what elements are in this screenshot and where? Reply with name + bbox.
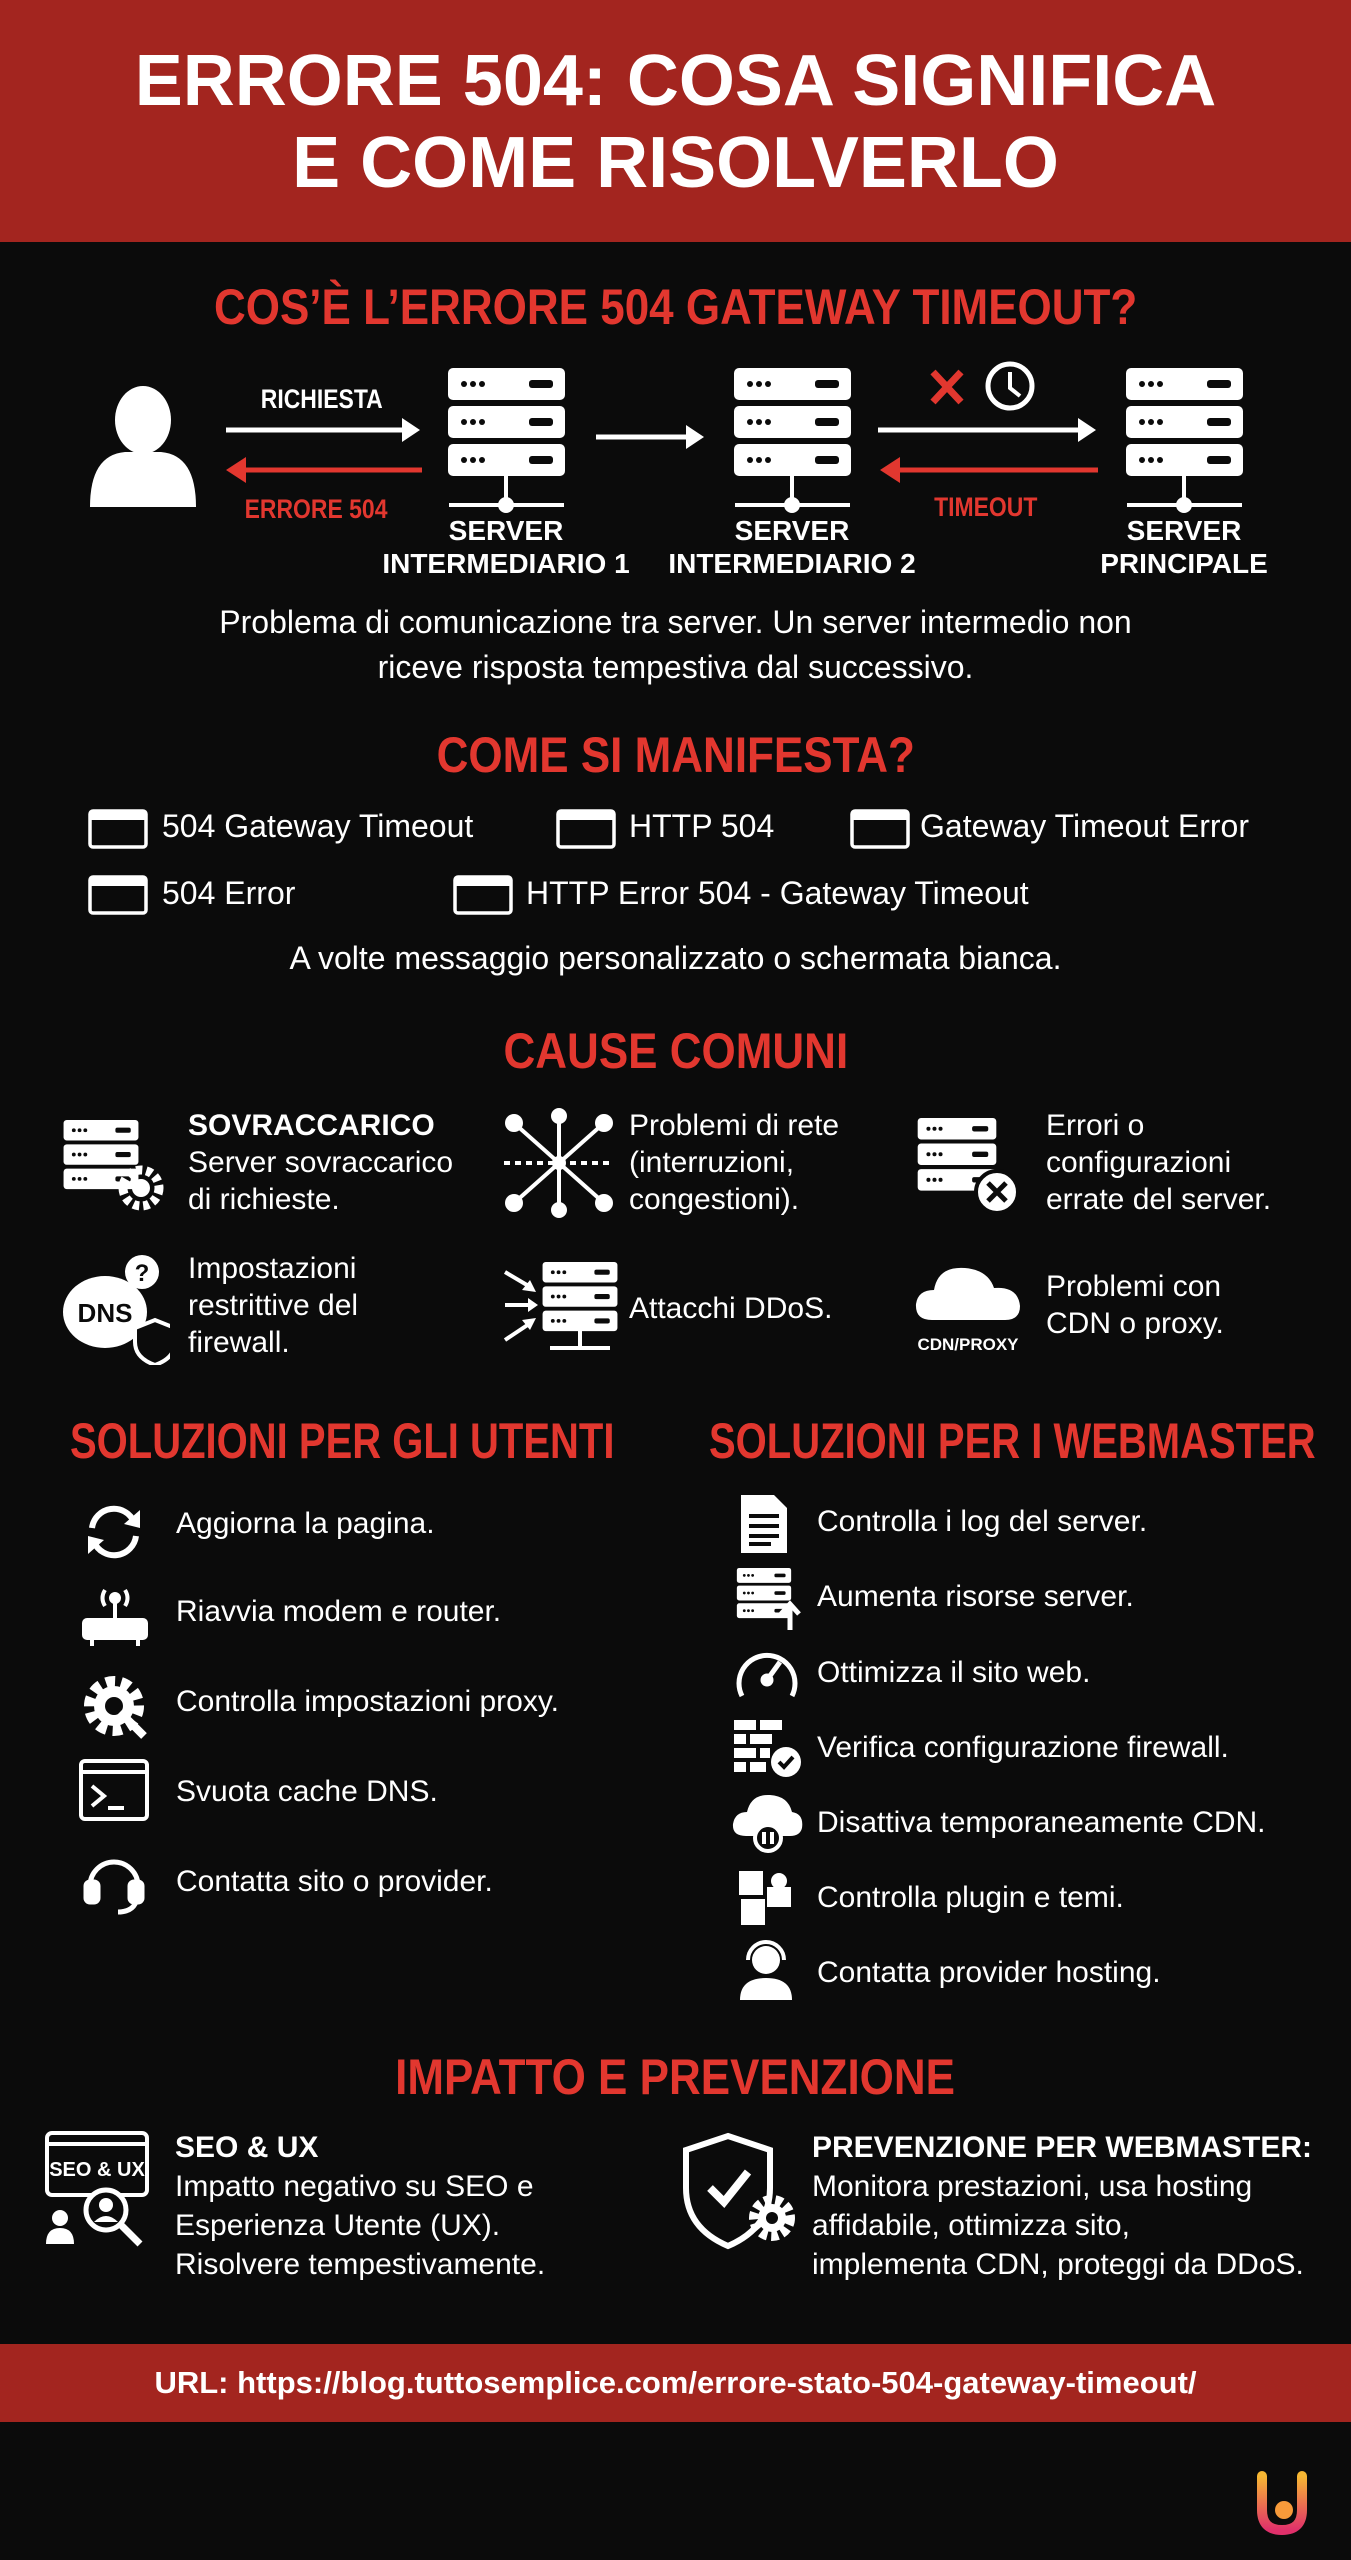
panel: SEO & UX bbox=[45, 2131, 545, 2281]
causes grid: SOVRACCARICO bbox=[188, 1109, 435, 1142]
icon: network bbox=[504, 1108, 613, 1218]
icon: cloud CDN: CDN/PROXY bbox=[917, 1335, 1019, 1354]
icon: x and clock bbox=[933, 364, 1032, 408]
panel: SEO & UX: Impatto negativo su SEO e bbox=[175, 2170, 534, 2203]
heading: cos'è: COS’È L’ERRORE 504 GATEWAY TIMEOUT? bbox=[214, 279, 1137, 335]
icon: gear wrench bbox=[84, 1676, 147, 1739]
title: E COME RISOLVERLO bbox=[292, 123, 1059, 203]
server labels: PRINCIPALE bbox=[1100, 548, 1268, 579]
error variants: HTTP 504 bbox=[629, 808, 774, 844]
causes grid: congestioni). bbox=[629, 1183, 799, 1216]
heading: soluzioni webmaster: SOLUZIONI PER I WEBMASTER bbox=[709, 1413, 1316, 1469]
icon: firewall check bbox=[734, 1720, 801, 1777]
server labels: SERVER bbox=[735, 515, 849, 546]
icon: document bbox=[741, 1495, 787, 1553]
error variants: HTTP Error 504 - Gateway Timeout bbox=[526, 875, 1029, 911]
list: webmaster solutions: Disattiva temporaneamente CDN. bbox=[817, 1806, 1266, 1839]
icon: seo ux: SEO & UX bbox=[49, 2159, 145, 2181]
list: webmaster solutions: Controlla plugin e temi. bbox=[817, 1881, 1124, 1914]
causes grid: errate del server. bbox=[1046, 1183, 1271, 1216]
icon: shield gear bbox=[683, 2132, 795, 2250]
causes grid: restrittive del bbox=[188, 1289, 358, 1322]
causes grid: di richieste. bbox=[188, 1183, 340, 1216]
heading: impatto e prevenzione: IMPATTO E PREVENZIONE bbox=[396, 2049, 955, 2105]
icon: headset bbox=[84, 1860, 144, 1914]
list: user solutions: Contatta sito o provider. bbox=[176, 1865, 493, 1898]
heading: soluzioni utenti: SOLUZIONI PER GLI UTENTI bbox=[70, 1413, 614, 1469]
causes grid: configurazioni bbox=[1046, 1146, 1231, 1179]
icon: ddos bbox=[504, 1262, 618, 1350]
list: user solutions bbox=[79, 1506, 559, 1914]
url bar bbox=[0, 2344, 1351, 2422]
causes grid: Problemi di rete bbox=[629, 1109, 839, 1142]
diagram: request flow bbox=[90, 362, 1243, 513]
header band bbox=[0, 0, 1351, 242]
error variants bbox=[88, 808, 1249, 915]
heading: cause comuni: CAUSE COMUNI bbox=[503, 1023, 848, 1079]
causes grid: firewall. bbox=[188, 1326, 290, 1359]
list: webmaster solutions: Aumenta risorse server. bbox=[817, 1580, 1134, 1613]
causes grid bbox=[63, 1108, 1271, 1365]
server labels: SERVER bbox=[449, 515, 563, 546]
error variants: 504 Gateway Timeout bbox=[162, 808, 473, 844]
panel: SEO & UX: SEO & UX bbox=[175, 2131, 318, 2164]
causes grid: Errori o bbox=[1046, 1109, 1144, 1142]
icon: router bbox=[82, 1589, 148, 1646]
causes grid: Problemi con bbox=[1046, 1270, 1221, 1303]
icon: puzzle bbox=[739, 1871, 791, 1925]
description text: riceve risposta tempestiva dal successivo. bbox=[378, 649, 973, 685]
causes grid: CDN o proxy. bbox=[1046, 1307, 1224, 1340]
panel: SEO & UX: Risolvere tempestivamente. bbox=[175, 2248, 545, 2281]
icon: refresh bbox=[88, 1506, 140, 1558]
note: A volte messaggio personalizzato o schermata bianca. bbox=[290, 940, 1061, 976]
description text: Problema di comunicazione tra server. Un server intermedio non bbox=[219, 604, 1132, 640]
list: webmaster solutions: Controlla i log del server. bbox=[817, 1505, 1147, 1538]
url bar: URL: https://blog.tuttosemplice.com/errore-stato-504-gateway-timeout/ bbox=[154, 2365, 1197, 2400]
icon: DNS shield: ? bbox=[135, 1260, 149, 1287]
icon: cloud CDN bbox=[916, 1268, 1020, 1354]
title: ERRORE 504: COSA SIGNIFICA bbox=[135, 41, 1216, 121]
icon: server gear bbox=[64, 1120, 164, 1210]
panel: prevenzione: affidabile, ottimizza sito, bbox=[812, 2209, 1130, 2242]
server labels bbox=[382, 515, 1268, 579]
icon: server up bbox=[736, 1568, 801, 1630]
panel: prevenzione: implementa CDN, proteggi da DDoS. bbox=[812, 2248, 1304, 2281]
panel: SEO & UX: Esperienza Utente (UX). bbox=[175, 2209, 500, 2242]
error variants: 504 Error bbox=[162, 875, 295, 911]
arrows bbox=[226, 418, 1098, 483]
icon: gauge bbox=[736, 1652, 798, 1698]
label: timeout: TIMEOUT bbox=[934, 492, 1037, 522]
server labels: SERVER bbox=[1127, 515, 1241, 546]
icon: DNS shield bbox=[63, 1255, 170, 1365]
list: webmaster solutions: Verifica configurazione firewall. bbox=[817, 1731, 1229, 1764]
logo bbox=[1257, 2471, 1307, 2535]
list: user solutions: Aggiorna la pagina. bbox=[176, 1507, 435, 1540]
icon: seo ux bbox=[45, 2131, 149, 2246]
server labels: INTERMEDIARIO 2 bbox=[668, 548, 916, 579]
heading: come si manifesta: COME SI MANIFESTA? bbox=[436, 727, 915, 783]
list: user solutions: Controlla impostazioni proxy. bbox=[176, 1685, 559, 1718]
error variants: Gateway Timeout Error bbox=[920, 808, 1249, 844]
title bbox=[135, 41, 1216, 203]
icon: user bbox=[90, 386, 196, 507]
label: richiesta: RICHIESTA bbox=[261, 384, 383, 414]
panel: prevenzione: PREVENZIONE PER WEBMASTER: bbox=[812, 2131, 1312, 2164]
icon: server x bbox=[918, 1118, 1016, 1211]
panel: prevenzione bbox=[683, 2131, 1312, 2281]
description text bbox=[219, 604, 1132, 685]
list: user solutions: Riavvia modem e router. bbox=[176, 1595, 501, 1628]
panel: prevenzione: Monitora prestazioni, usa hosting bbox=[812, 2170, 1252, 2203]
causes grid: Impostazioni bbox=[188, 1252, 356, 1285]
list: webmaster solutions bbox=[732, 1495, 1266, 2000]
list: webmaster solutions: Ottimizza il sito web. bbox=[817, 1656, 1090, 1689]
icon: support person bbox=[740, 1940, 792, 2000]
server labels: INTERMEDIARIO 1 bbox=[382, 548, 630, 579]
label: errore 504: ERRORE 504 bbox=[245, 494, 387, 524]
causes grid: Attacchi DDoS. bbox=[629, 1292, 832, 1325]
causes grid: Server sovraccarico bbox=[188, 1146, 453, 1179]
list: user solutions: Svuota cache DNS. bbox=[176, 1775, 438, 1808]
icon: DNS shield: DNS bbox=[78, 1298, 132, 1328]
icon: terminal bbox=[79, 1759, 149, 1821]
list: webmaster solutions: Contatta provider hosting. bbox=[817, 1956, 1161, 1989]
causes grid: (interruzioni, bbox=[629, 1146, 794, 1179]
servers bbox=[448, 368, 565, 476]
icon: cloud pause bbox=[732, 1795, 802, 1853]
